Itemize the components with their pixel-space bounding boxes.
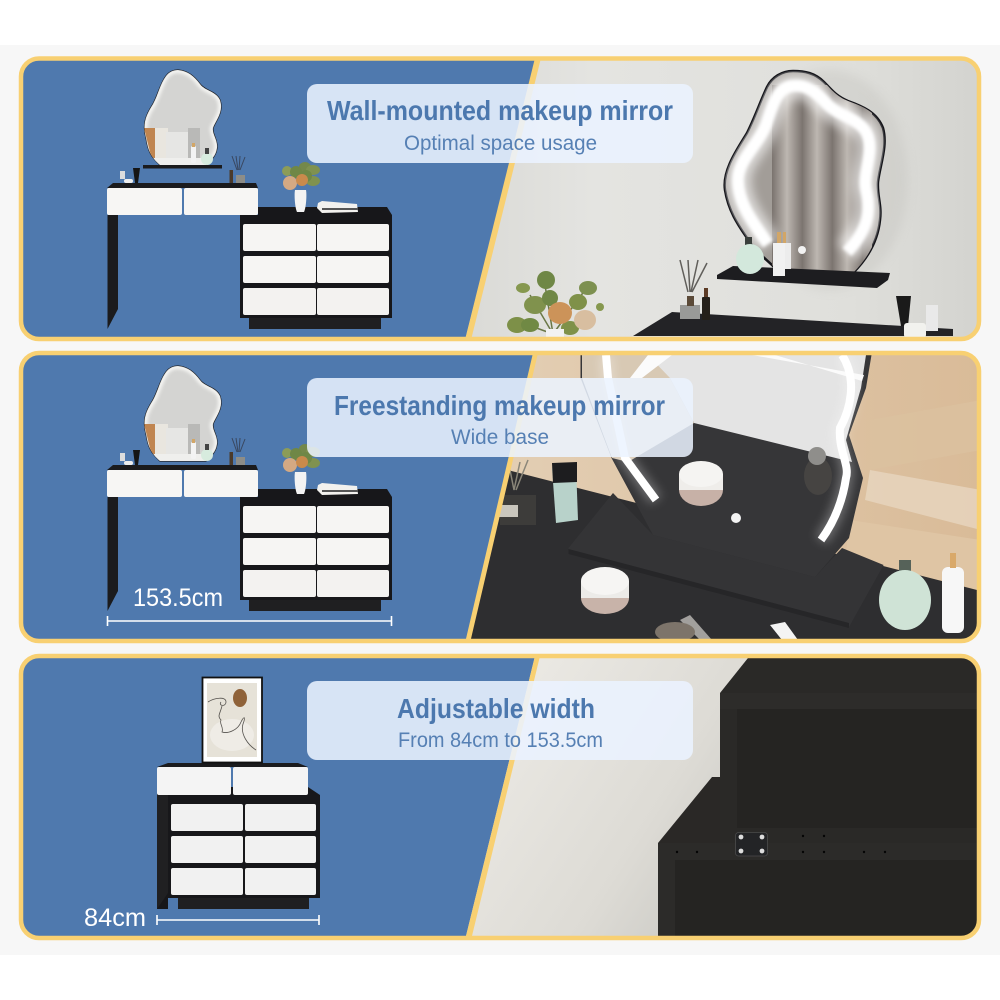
skincare tubes (896, 296, 938, 338)
furniture: extended vanity (107, 438, 392, 611)
subheading: From 84cm to 153.5cm (398, 729, 603, 752)
small mirror illustration (144, 70, 221, 166)
LED glow (606, 355, 851, 540)
framed line art (202, 678, 262, 762)
subheading: Optimal space usage (404, 132, 597, 155)
vanity tabletop (633, 312, 953, 336)
heading: Freestanding makeup mirror (334, 390, 665, 421)
wall shelf (717, 266, 890, 288)
wood planks (865, 470, 977, 590)
dimension line (108, 616, 392, 626)
heading: Adjustable width (397, 693, 595, 724)
small dropper bottle (702, 288, 710, 320)
label box (307, 681, 693, 760)
reed diffuser jar (498, 460, 536, 525)
powder jar on table (581, 567, 629, 614)
heading: Wall-mounted makeup mirror (327, 95, 673, 126)
label box (307, 378, 693, 457)
mirror body (580, 355, 872, 554)
touch button (731, 513, 741, 523)
touch button (798, 246, 806, 254)
panel: wall-mounted makeup mirror (21, 58, 981, 340)
freestanding mirror illustration (144, 366, 221, 462)
label box (307, 84, 693, 163)
illuminated cloud mirror (725, 71, 885, 275)
furniture: extended vanity with wall mirror (107, 156, 392, 329)
square bottle (552, 462, 578, 523)
furniture: compact dresser with framed art (157, 763, 320, 909)
powder jar on base (679, 461, 723, 506)
diagonal divider (465, 353, 538, 643)
screw holes (676, 835, 886, 853)
perfume bottle (879, 560, 931, 630)
hinge plate (736, 832, 768, 856)
reed diffuser (680, 260, 707, 319)
photo: mirror on the desk (460, 353, 981, 644)
mirror base (610, 493, 884, 566)
decorative vase reflection (804, 447, 832, 495)
upper cabinet (720, 658, 981, 843)
dimension line (157, 915, 319, 925)
makeup brush (655, 615, 711, 639)
width label: 153.5cm (133, 584, 223, 612)
diagonal divider (465, 656, 540, 940)
subheading: Wide base (451, 426, 549, 449)
LED strips (606, 355, 851, 540)
panel border (21, 353, 979, 641)
pump bottles (773, 232, 791, 276)
mirror reflections (582, 355, 866, 462)
panel border (21, 58, 979, 339)
width label: 84cm (84, 904, 146, 932)
photo: mirror on the wall (465, 58, 981, 340)
mirror shadow (817, 72, 904, 287)
photo: cabinets detail (465, 656, 981, 943)
panel: freestanding makeup mirror (21, 353, 981, 644)
lotion pump bottle (942, 553, 964, 633)
diagonal divider (465, 58, 541, 340)
small shelf (143, 165, 222, 168)
potted plant (507, 271, 604, 337)
table surface (460, 463, 981, 644)
panel: adjustable width (21, 656, 981, 943)
panel border (21, 656, 979, 938)
perfume (736, 237, 764, 274)
lower cabinet (658, 777, 981, 943)
